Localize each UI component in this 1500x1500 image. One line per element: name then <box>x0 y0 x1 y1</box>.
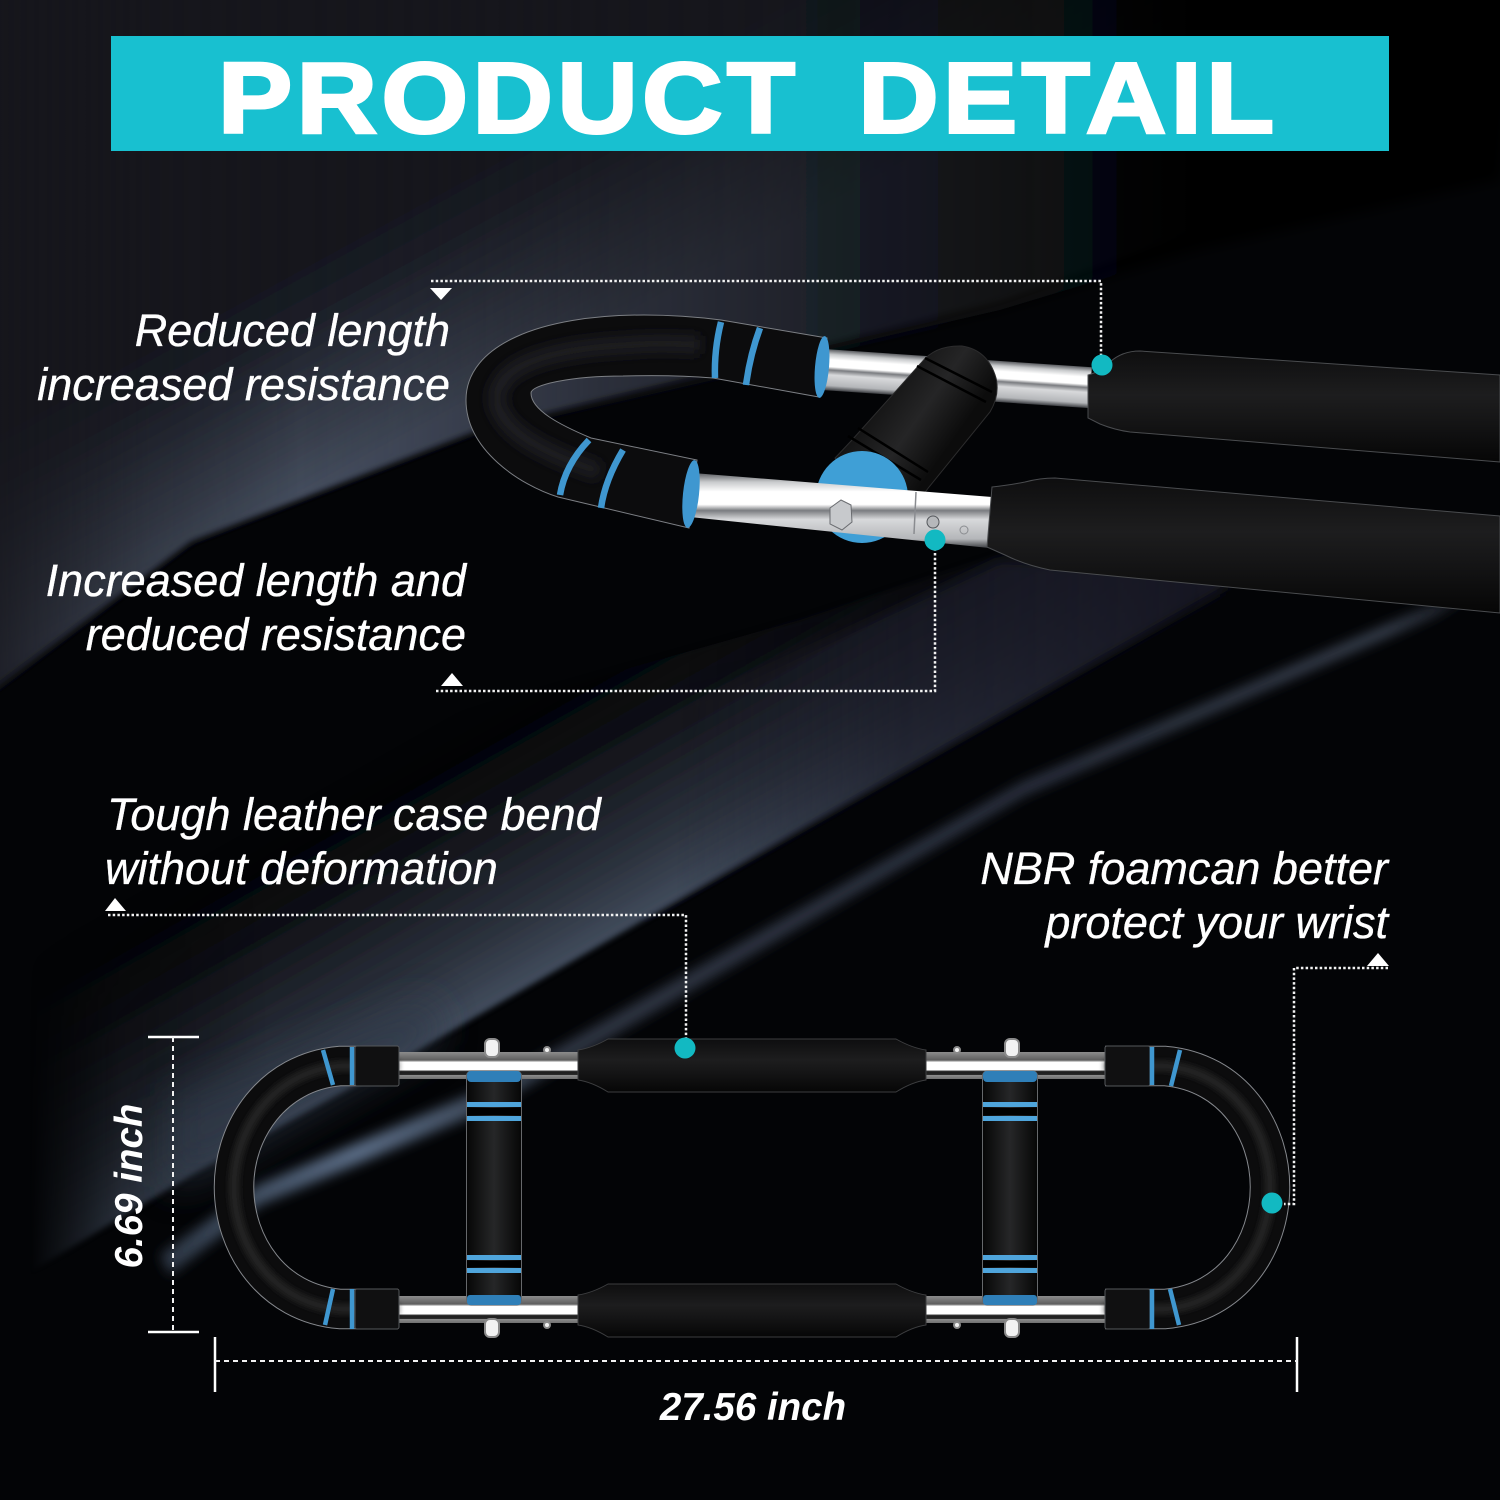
dimension: width 27.56 inch <box>215 1337 1297 1429</box>
callout: NBR foam: NBR foamcan better <box>980 843 1390 894</box>
bolt and rivets <box>830 500 852 530</box>
centre handle <box>835 346 997 510</box>
callout: increased length <box>46 530 946 691</box>
foam end caps <box>355 1046 399 1086</box>
steel rods <box>398 1052 580 1079</box>
right long foam handles <box>1088 351 1500 462</box>
upper steel rod <box>822 349 1092 408</box>
callout: increased length: reduced resistance <box>86 609 466 660</box>
blue end plate <box>816 451 908 543</box>
dimension: width 27.56 inch: 27.56 inch <box>659 1386 846 1429</box>
U-shaped foam bend <box>466 315 827 528</box>
callout: NBR foam: protect your wrist <box>1043 897 1390 948</box>
dimension: height 6.69 inch: 6.69 inch <box>108 1104 151 1268</box>
callout: increased length: Increased length and <box>46 555 468 606</box>
callout: tough leather case: Tough leather case bend <box>107 789 603 840</box>
callout: reduced length: increased resistance <box>37 359 450 410</box>
bolts and rivets <box>485 1039 1019 1337</box>
blue rings <box>323 1047 1180 1329</box>
callout: reduced length: Reduced length <box>135 305 450 356</box>
dimension: height 6.69 inch <box>108 1037 199 1332</box>
callout: tough leather case <box>105 789 696 1058</box>
callout: tough leather case: without deformation <box>105 843 498 894</box>
product photo: full top view of trainer <box>234 1039 1270 1337</box>
side handles <box>466 1071 522 1305</box>
blue rings <box>560 322 760 508</box>
lower steel rod <box>690 473 992 548</box>
product photo: adjustable arm trainer close-up <box>466 315 1500 613</box>
title banner: PRODUCT DETAIL <box>218 43 1279 154</box>
U-bends <box>234 1066 1270 1309</box>
centre foam bars <box>578 1039 926 1092</box>
callout: NBR foam <box>980 843 1390 1214</box>
callout: reduced length <box>37 281 1112 410</box>
blue foam caps <box>812 336 832 398</box>
